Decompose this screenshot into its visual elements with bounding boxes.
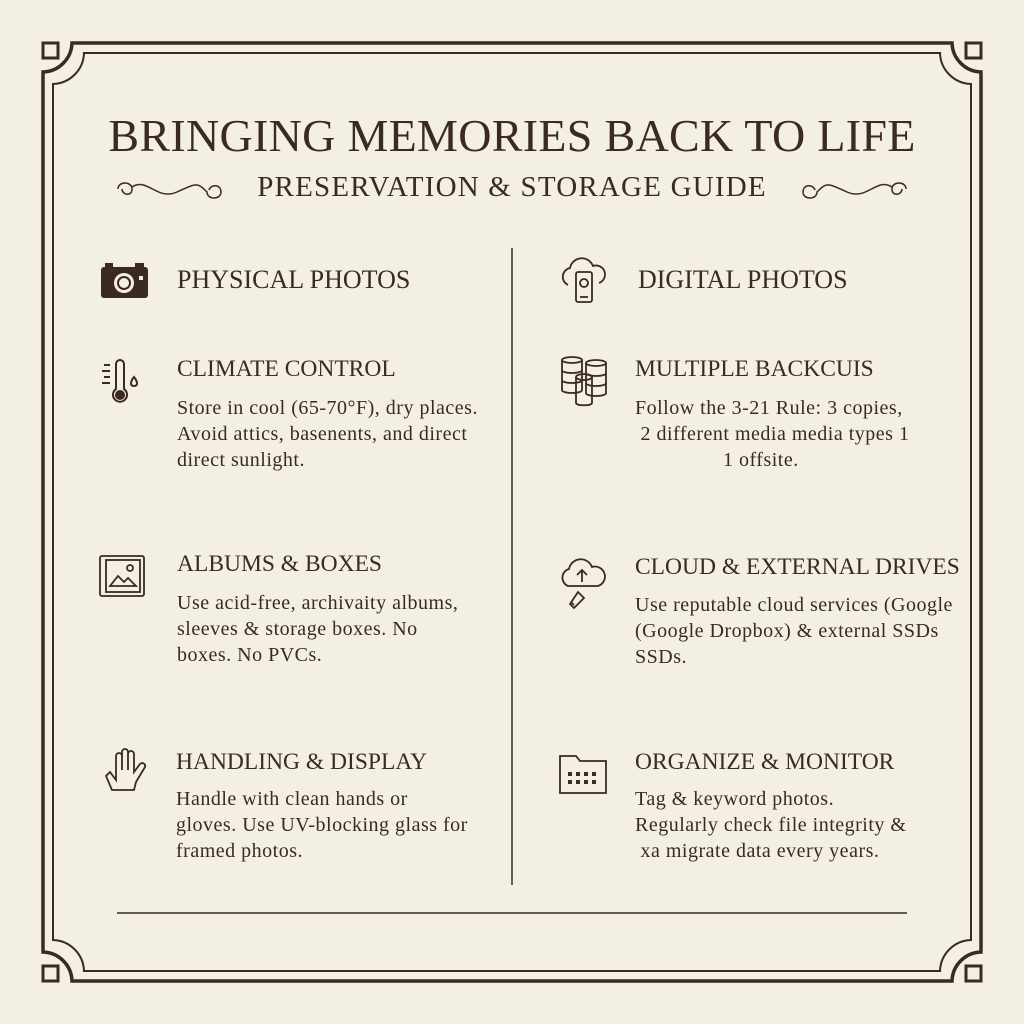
icon: camera [101, 263, 148, 298]
item: backups: Follow the 3-21 Rule: 3 copies, [635, 397, 903, 419]
item: organize: Tag & keyword photos. [635, 788, 834, 810]
item: climate control [102, 356, 478, 471]
icon: cloud phone [562, 257, 606, 303]
item: cloud: SSDs. [635, 646, 687, 668]
item: organize: ORGANIZE & MONITOR [635, 749, 894, 775]
item: albums: boxes. No PVCs. [177, 644, 322, 666]
item: climate control: CLIMATE CONTROL [177, 356, 396, 382]
item: handling [105, 748, 468, 862]
item: albums [99, 551, 458, 666]
item: climate control: Avoid attics, basenents, and direct [177, 423, 467, 445]
item: cloud: Use reputable cloud services (Google [635, 594, 953, 616]
item: climate control: direct sunlight. [177, 449, 305, 471]
item: organize [559, 749, 906, 862]
item: cloud [562, 554, 960, 668]
heading: physical photos: PHYSICAL PHOTOS [177, 265, 410, 294]
item: organize: xa migrate data every years. [640, 840, 879, 862]
item: backups: MULTIPLE BACKCUIS [635, 356, 874, 382]
item: cloud: CLOUD & EXTERNAL DRIVES [635, 554, 960, 580]
item: climate control: Store in cool (65-70°F), dry places. [177, 397, 478, 419]
item: backups: 2 different media media types 1 [640, 423, 909, 445]
heading: digital photos: DIGITAL PHOTOS [638, 265, 848, 294]
item: backups: 1 offsite. [723, 449, 799, 471]
item: handling: framed photos. [176, 840, 303, 862]
item: organize: Regularly check file integrity & [635, 814, 906, 836]
title: BRINGING MEMORIES BACK TO LIFE [108, 110, 916, 161]
icon: glove [105, 748, 146, 791]
item: backups [561, 356, 909, 471]
icon: thermometer [102, 359, 138, 403]
item: albums: Use acid-free, archivaity albums, [177, 592, 458, 614]
item: handling: Handle with clean hands or [176, 788, 408, 810]
item: albums: ALBUMS & BOXES [177, 551, 382, 577]
subtitle with flourishes [117, 171, 907, 203]
icon: database [561, 356, 607, 406]
item: handling: HANDLING & DISPLAY [176, 749, 427, 775]
item: handling: gloves. Use UV-blocking glass for [176, 814, 468, 836]
icon: cloud upload [562, 558, 606, 610]
item: albums: sleeves & storage boxes. No [177, 618, 418, 640]
subtitle with flourishes: PRESERVATION & STORAGE GUIDE [257, 171, 767, 203]
icon: album [99, 555, 145, 597]
item: cloud: (Google Dropbox) & external SSDs [635, 620, 939, 642]
icon: folder calendar [559, 755, 607, 794]
